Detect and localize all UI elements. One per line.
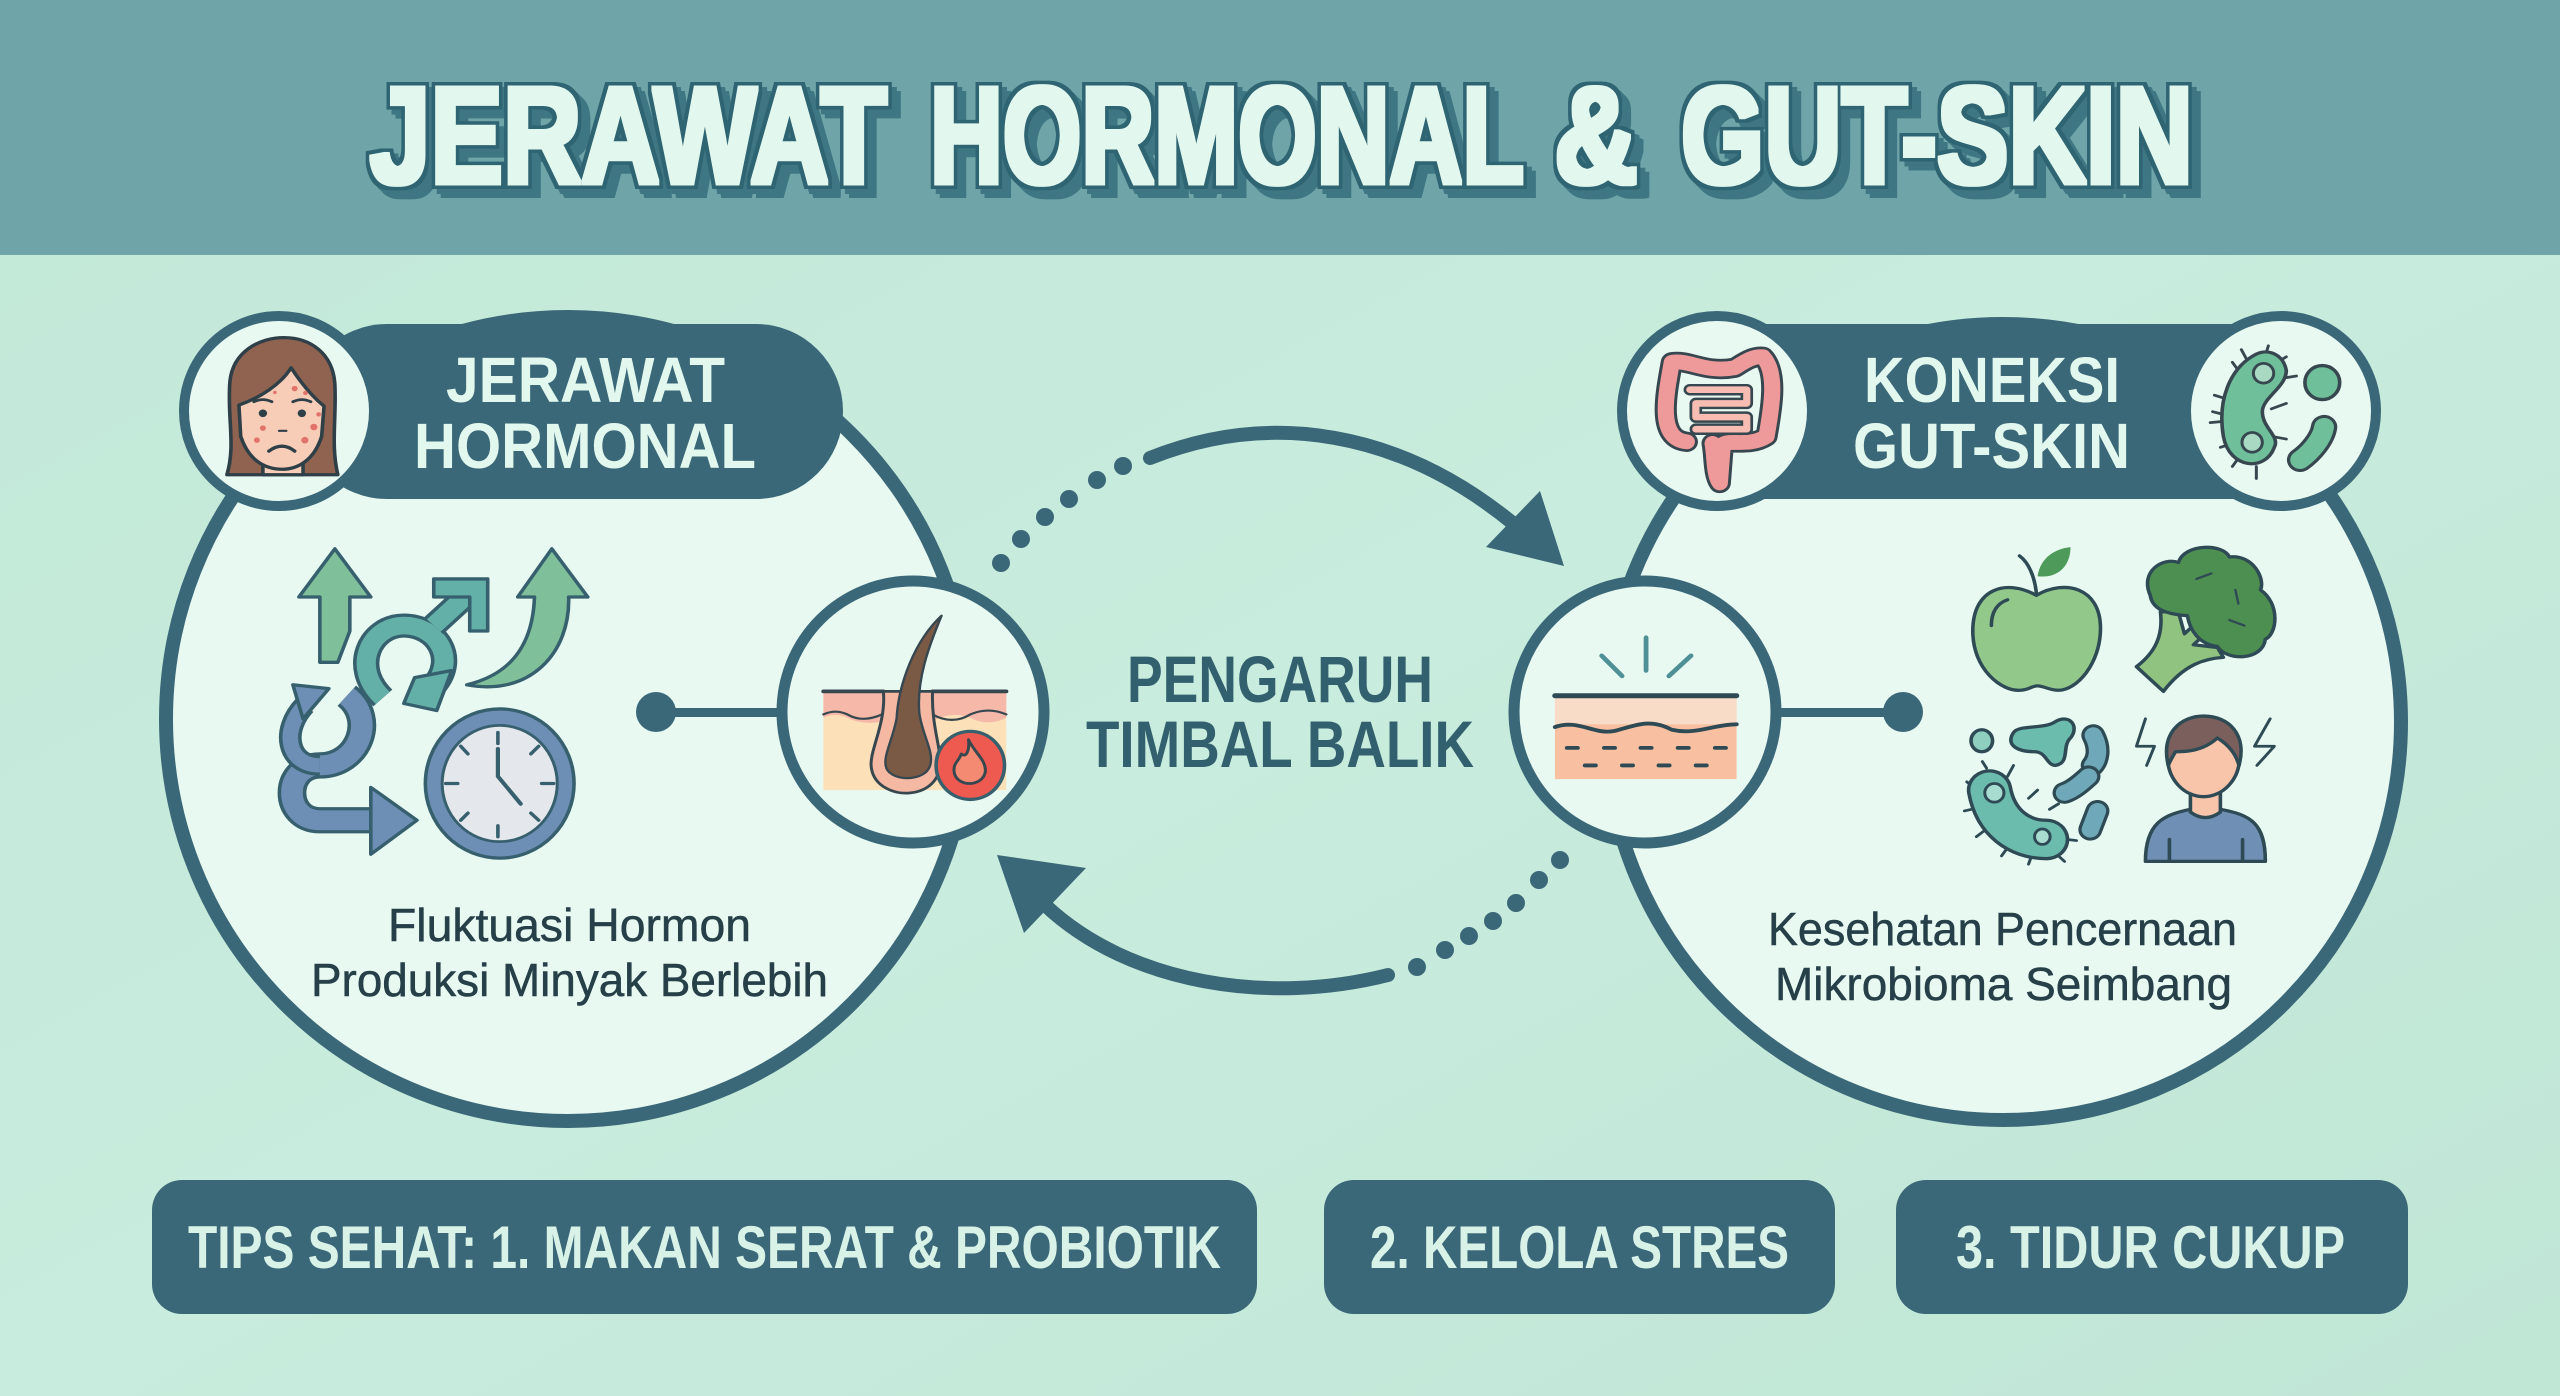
icon: green up arrow <box>299 549 371 662</box>
arrow: top curved arrow <box>992 433 1564 572</box>
icon: broccoli <box>2136 547 2275 691</box>
tip pill 1 <box>152 1180 1257 1314</box>
text block: left panel description: Produksi Minyak Berlebih <box>311 954 828 1006</box>
tip pill 2 <box>1324 1180 1835 1314</box>
title <box>370 59 2193 213</box>
icon: gut microbes <box>1964 719 2098 864</box>
heading: pengaruh timbal balik <box>1086 642 1474 781</box>
tip pill 3: 3. TIDUR CUKUP <box>1956 1214 2345 1281</box>
panel: koneksi gut-skin circle <box>1605 324 2401 1120</box>
text block: right panel description <box>1768 903 2237 1010</box>
small circle: follicle <box>782 581 1044 843</box>
arrow: bottom curved arrow <box>997 851 1569 988</box>
heading: pengaruh timbal balik: TIMBAL BALIK <box>1086 707 1474 781</box>
icon: teal cycle arrow <box>366 579 488 711</box>
banner: koneksi gut-skin: GUT-SKIN <box>1853 410 2130 482</box>
icon: curved green arrow <box>467 549 588 687</box>
icons of right panel <box>1555 346 2340 864</box>
text block: right panel description: Kesehatan Pencernaan <box>1768 903 2237 955</box>
tip pill 1: TIPS SEHAT: 1. MAKAN SERAT & PROBIOTIK <box>188 1214 1221 1281</box>
banner: jerawat hormonal: JERAWAT <box>446 344 725 416</box>
text block: left panel description <box>311 899 828 1006</box>
icon: clock <box>425 709 574 858</box>
banner: koneksi gut-skin: KONEKSI <box>1864 344 2120 416</box>
header band <box>0 0 2560 255</box>
title: JERAWAT <box>370 59 887 213</box>
avatar circle: face <box>184 316 374 506</box>
connector: right <box>1770 692 1923 732</box>
title: HORMONAL <box>930 59 1524 213</box>
icon: skin layer <box>1555 638 1737 779</box>
icon: stressed person <box>2136 716 2274 861</box>
title: GUT-SKIN <box>1681 59 2193 213</box>
heading: pengaruh timbal balik: PENGARUH <box>1127 642 1433 716</box>
tip pill 2: 2. KELOLA STRES <box>1370 1214 1789 1281</box>
banner: koneksi gut-skin <box>1717 324 2281 499</box>
icon: hair follicle with inflammation <box>823 616 1006 799</box>
connector: left <box>636 692 781 732</box>
avatar circle: gut <box>1622 316 1812 506</box>
title: & <box>1554 59 1638 213</box>
icon: woman with acne <box>227 338 338 475</box>
banner: jerawat hormonal <box>300 324 843 499</box>
tip pill 3 <box>1896 1180 2408 1314</box>
icons of left panel <box>227 338 1006 858</box>
small circle: skin <box>1514 581 1776 843</box>
panel: jerawat hormonal circle <box>166 317 970 1121</box>
text block: right panel description: Mikrobioma Seimbang <box>1775 958 2232 1010</box>
avatar circle: bacteria <box>2186 316 2376 506</box>
icon: blue loop arrow <box>290 685 417 854</box>
banner: jerawat hormonal: HORMONAL <box>414 410 756 482</box>
icon: apple <box>1973 547 2100 690</box>
icon: bacteria in circle <box>2210 346 2340 479</box>
text block: left panel description: Fluktuasi Hormon <box>388 899 751 951</box>
icon: gut <box>1666 357 1772 483</box>
